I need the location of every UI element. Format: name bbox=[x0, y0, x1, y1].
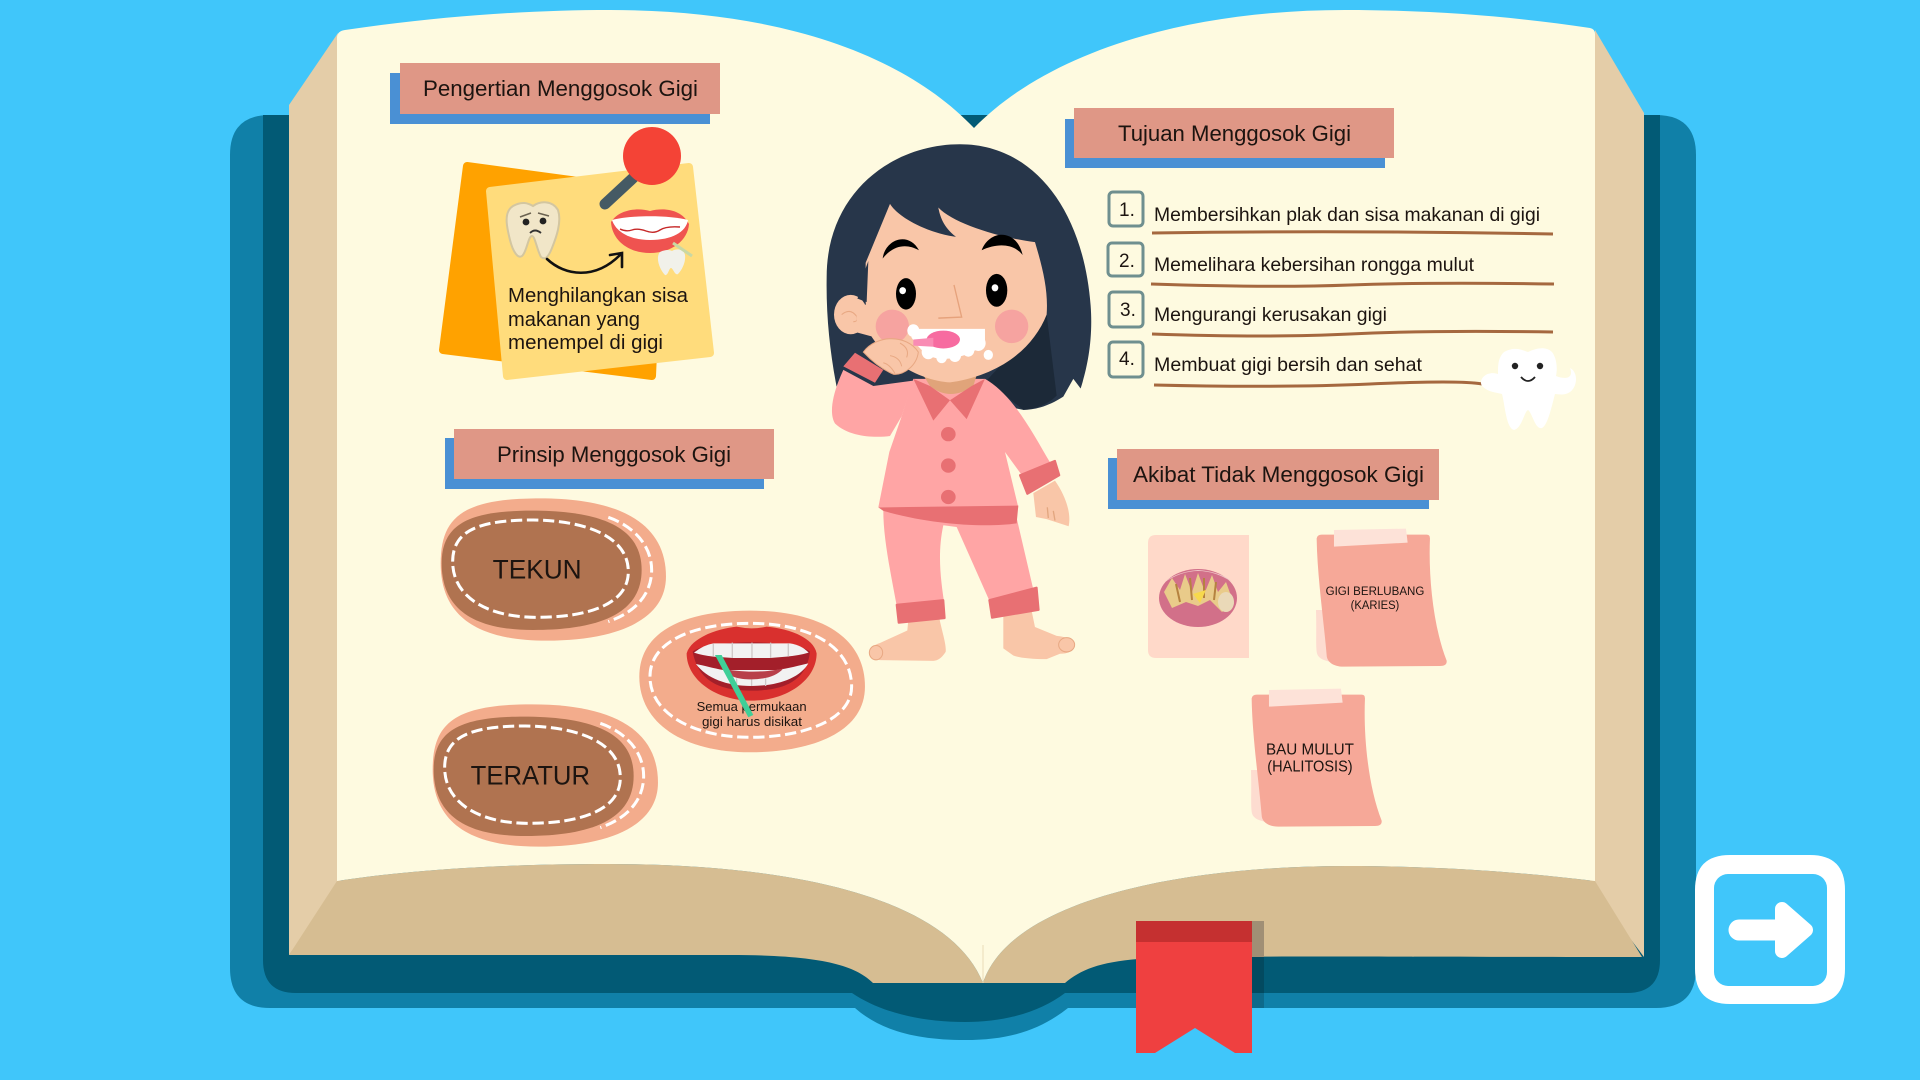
badge: mouth with toothbrush bbox=[639, 611, 865, 752]
list item 2 bbox=[1108, 243, 1554, 286]
list item 3: Mengurangi kerusakan gigi bbox=[1154, 304, 1387, 326]
numbered list bbox=[1108, 192, 1554, 386]
toothpaste foam bbox=[907, 324, 993, 363]
sticky note text: makanan yang bbox=[508, 309, 640, 331]
character: girl brushing teeth bbox=[827, 144, 1091, 661]
note: gigi berlubang: GIGI BERLUBANG bbox=[1326, 584, 1424, 598]
note: bau mulut bbox=[1251, 689, 1382, 827]
shirt bbox=[878, 379, 1069, 526]
hair shadow bbox=[987, 315, 1057, 410]
book outer cover bbox=[230, 115, 1696, 1040]
arrow bbox=[547, 253, 622, 273]
heading: Pengertian Menggosok Gigi: Pengertian Menggosok Gigi bbox=[423, 76, 698, 101]
icon: pink toothbrush bbox=[913, 331, 960, 348]
heading: Prinsip Menggosok Gigi bbox=[445, 429, 774, 489]
caption: gigi harus disikat bbox=[702, 714, 802, 729]
bookmark bbox=[1136, 921, 1264, 1053]
card: photo of decayed teeth bbox=[1148, 535, 1249, 658]
caption: Semua permukaan bbox=[697, 699, 807, 714]
note: gigi berlubang bbox=[1316, 529, 1447, 667]
list item 3 bbox=[1109, 292, 1553, 336]
badge: TEKUN: TEKUN bbox=[493, 554, 582, 584]
icon: small tooth with brush bbox=[658, 243, 692, 275]
note: gigi berlubang: (KARIES) bbox=[1351, 598, 1399, 612]
right page side bbox=[1590, 30, 1644, 957]
button: next arrow bbox=[1695, 855, 1845, 1004]
list item 1: 1. bbox=[1119, 200, 1135, 221]
icon: open mouth bbox=[687, 627, 817, 701]
heading: Prinsip Menggosok Gigi: Prinsip Menggosok Gigi bbox=[497, 442, 731, 467]
list item 4: 4. bbox=[1119, 349, 1135, 370]
icon: happy white tooth bbox=[1481, 348, 1576, 430]
list item 3: 3. bbox=[1120, 300, 1136, 321]
raised arm and hand bbox=[832, 339, 918, 437]
yellow front note bbox=[490, 167, 710, 376]
list item 2: Memelihara kebersihan rongga mulut bbox=[1154, 254, 1475, 276]
heading: Tujuan Menggosok Gigi: Tujuan Menggosok Gigi bbox=[1118, 121, 1351, 146]
icon: sad tooth bbox=[507, 202, 559, 258]
icon: healthy mouth bbox=[611, 209, 689, 253]
face bbox=[834, 204, 1047, 382]
badge: TERATUR: TERATUR bbox=[471, 761, 590, 791]
list item 1: Membersihkan plak dan sisa makanan di gigi bbox=[1154, 204, 1540, 226]
badge: TEKUN bbox=[441, 498, 666, 641]
sticky note: definition bbox=[443, 127, 710, 376]
hair back bbox=[827, 144, 1091, 410]
note: bau mulut: BAU MULUT bbox=[1266, 741, 1354, 758]
list item 1 bbox=[1109, 192, 1553, 234]
legs bbox=[869, 511, 1075, 661]
list item 4: Membuat gigi bersih dan sehat bbox=[1154, 354, 1423, 376]
cream pages bbox=[337, 10, 1595, 983]
open book bbox=[230, 10, 1696, 1040]
orange back note bbox=[443, 166, 660, 376]
sticky note text: Menghilangkan sisa bbox=[508, 285, 689, 307]
list item 4 bbox=[1109, 342, 1482, 386]
sticky note text bbox=[508, 285, 689, 354]
heading: Akibat Tidak Menggosok Gigi bbox=[1108, 449, 1439, 509]
note: bau mulut: (HALITOSIS) bbox=[1267, 759, 1353, 776]
heading: Akibat Tidak Menggosok Gigi: Akibat Tidak Menggosok Gigi bbox=[1133, 462, 1424, 487]
heading: Pengertian Menggosok Gigi bbox=[390, 63, 720, 124]
sticky note text: menempel di gigi bbox=[508, 332, 663, 354]
icon: toothbrush bbox=[715, 655, 753, 717]
page block bottom bbox=[289, 864, 1642, 983]
page crease bbox=[982, 945, 984, 983]
left page side bbox=[289, 33, 340, 955]
heading: Tujuan Menggosok Gigi bbox=[1065, 108, 1394, 168]
neck and collar bbox=[913, 375, 985, 421]
caption bbox=[697, 699, 807, 729]
list item 2: 2. bbox=[1119, 251, 1135, 272]
icon: magnifier pin bbox=[605, 127, 681, 204]
badge: TERATUR bbox=[433, 704, 658, 847]
book inner cover bbox=[263, 115, 1660, 1022]
